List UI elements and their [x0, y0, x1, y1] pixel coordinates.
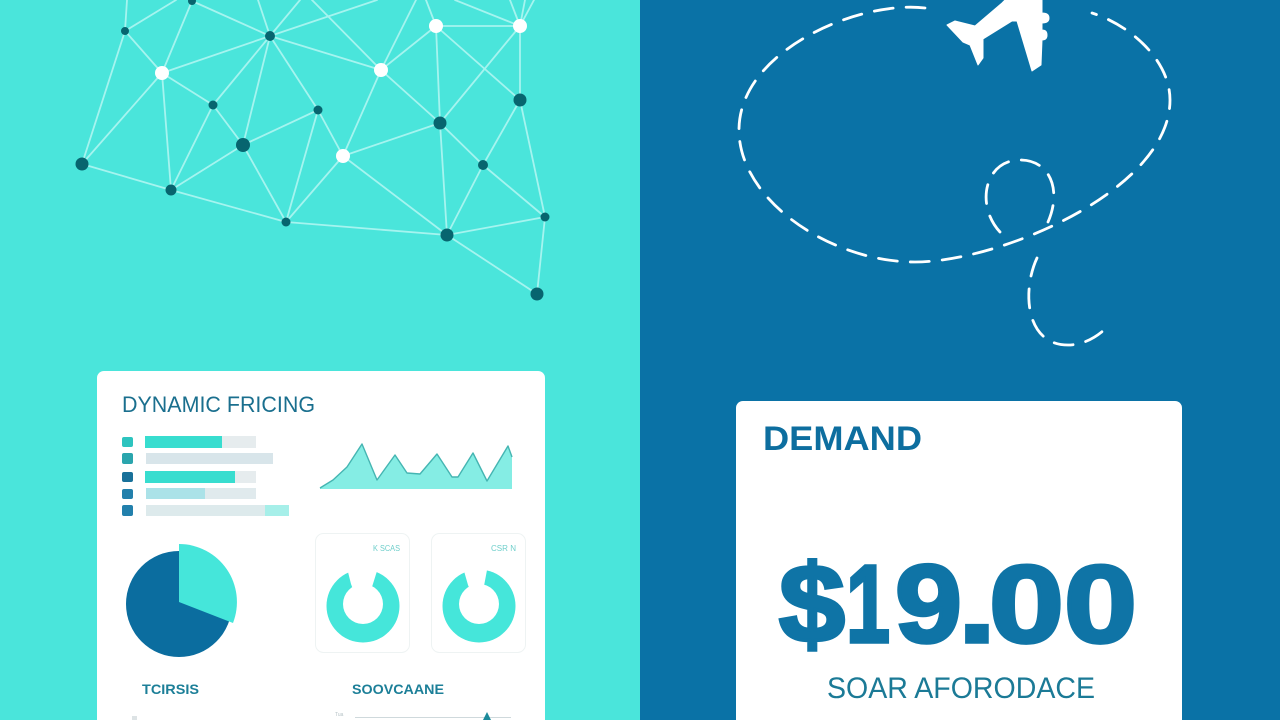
price figure: $: [779, 543, 845, 666]
price figure: 0: [989, 543, 1064, 666]
flight route dashed path: [739, 7, 1170, 345]
heading: dynamic pricing: DYNAMIC FRICING: [122, 392, 315, 417]
small card: right donut: CSR N: [491, 544, 516, 553]
panel: right blue background: [640, 0, 1280, 720]
card background: [736, 401, 1182, 720]
panel: dynamic pricing card: [97, 371, 545, 720]
white network nodes: [155, 19, 527, 163]
small gauge at bottom: Tua: [335, 712, 344, 718]
area chart: [320, 444, 512, 489]
label: right chart: SOOVCAANE: [352, 681, 444, 697]
small card: right donut: [432, 534, 526, 652]
dark network nodes: [76, 0, 550, 300]
network diagram: [76, 0, 550, 300]
price figure: 9: [895, 543, 962, 666]
small card: left donut: K SCAS: [373, 544, 400, 553]
icon: airplane: [947, 0, 1049, 71]
price figure: 1: [846, 543, 890, 666]
caption: SOAR AFORODACE: [827, 672, 1095, 705]
price figure: .: [958, 543, 996, 666]
heading: demand: DEMAND: [763, 420, 922, 458]
network links: [82, 0, 545, 294]
label: left chart: TCIRSIS: [142, 681, 199, 697]
small gauge at bottom: [132, 712, 511, 720]
horizontal bar list: [122, 436, 289, 516]
price figure: [779, 543, 1137, 666]
small card: left donut: [316, 534, 410, 652]
price figure: 0: [1064, 543, 1137, 666]
pie chart: [126, 544, 237, 657]
card background: [97, 371, 545, 720]
panel: demand card: [736, 401, 1182, 720]
panel: left teal background: [0, 0, 640, 720]
